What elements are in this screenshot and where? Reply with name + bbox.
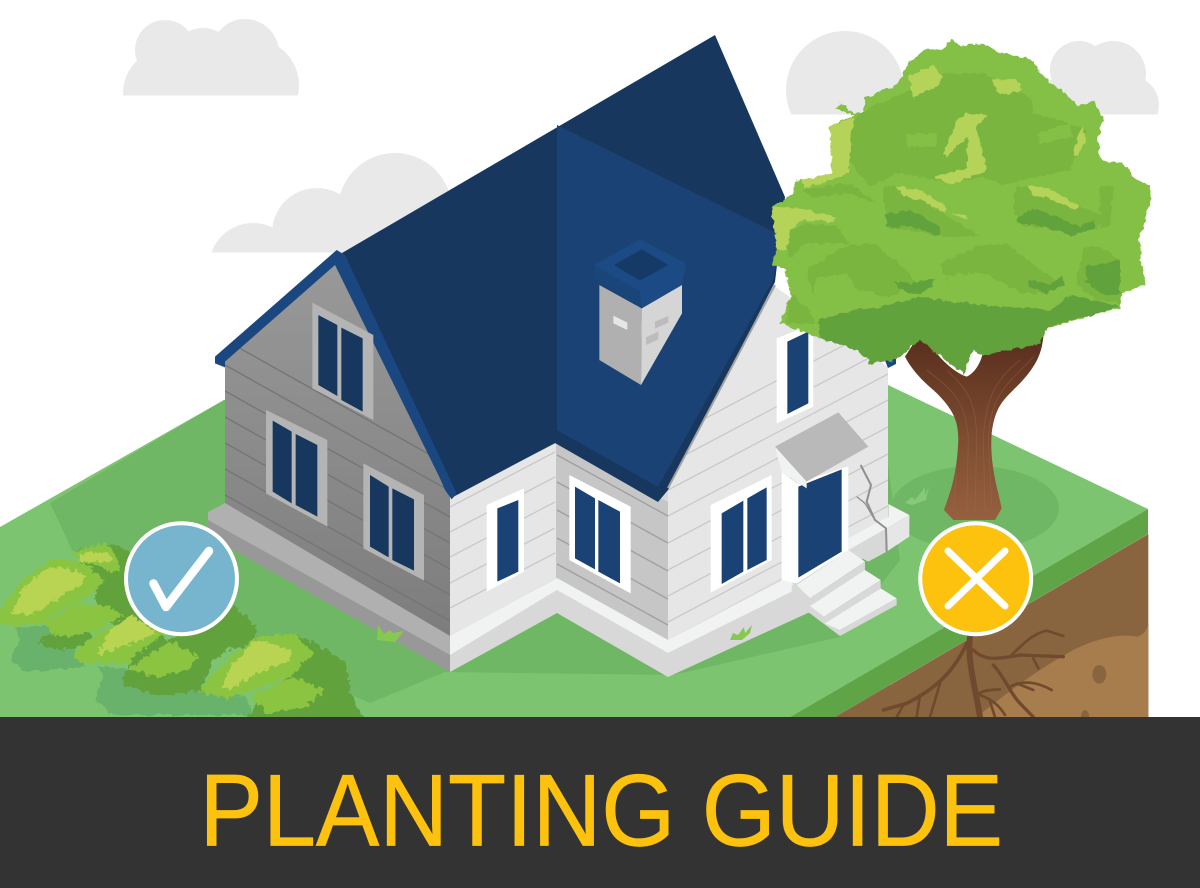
bush shadows [10,625,253,715]
eave shadow [668,285,775,488]
icon: check mark [154,551,209,607]
tree grass tuft [905,486,929,505]
narrow front window [487,488,524,592]
clouds [123,19,1159,311]
house shadow [50,400,900,703]
window upper [312,303,373,420]
trunk [905,333,1043,520]
canopy base [772,39,1152,373]
title banner [0,717,1200,888]
steps [792,550,897,636]
soil stones [1081,665,1106,722]
window upper narrow [777,323,813,423]
gray side wall [225,255,450,636]
window lower right [363,463,424,581]
gray foundation [208,503,450,672]
roots [883,631,1063,717]
recessed wall [556,443,668,640]
lawn edge [790,509,1148,717]
cloud 3 [786,31,902,114]
icon: cross mark [948,551,1005,606]
canopy light patches [817,123,1073,320]
tree [772,39,1152,520]
chimney [594,239,686,385]
house footprint underlay [450,367,888,665]
badge: cross bad placement [918,521,1033,636]
lawn [0,385,1148,722]
window lower left [266,410,327,527]
white wall left [450,443,556,636]
roof light face [557,125,782,487]
tree shadow [891,466,1059,550]
awning [775,412,868,488]
soil [835,534,1148,722]
side porch [848,504,909,562]
window recess [569,475,631,593]
house [208,35,909,677]
canopy highlights [772,65,1087,250]
roof dark mass [342,35,785,502]
light soil [977,623,1148,717]
cloud 2 [212,153,448,252]
lawn surface [0,385,1148,717]
roof corner behind tree [884,355,896,368]
white foundation [450,576,810,677]
front windows and door [569,323,868,593]
crack [857,465,887,552]
title: PLANTING GUIDE [200,752,1003,868]
grass tufts [377,625,752,642]
bush foliage [0,542,365,723]
canopy shadows [818,208,1120,373]
bushes [0,542,365,723]
white wall right [668,285,888,640]
tree foliage [772,39,1152,373]
badge: check good placement [124,521,239,636]
trunk grain [927,357,1033,513]
roof [215,35,785,502]
canopy mid tones [783,73,1120,323]
cloud 4 [1049,41,1159,114]
window right [711,475,772,593]
cloud 1 [123,19,299,96]
side windows [266,303,524,592]
gable verge [215,250,457,499]
door [782,467,848,583]
